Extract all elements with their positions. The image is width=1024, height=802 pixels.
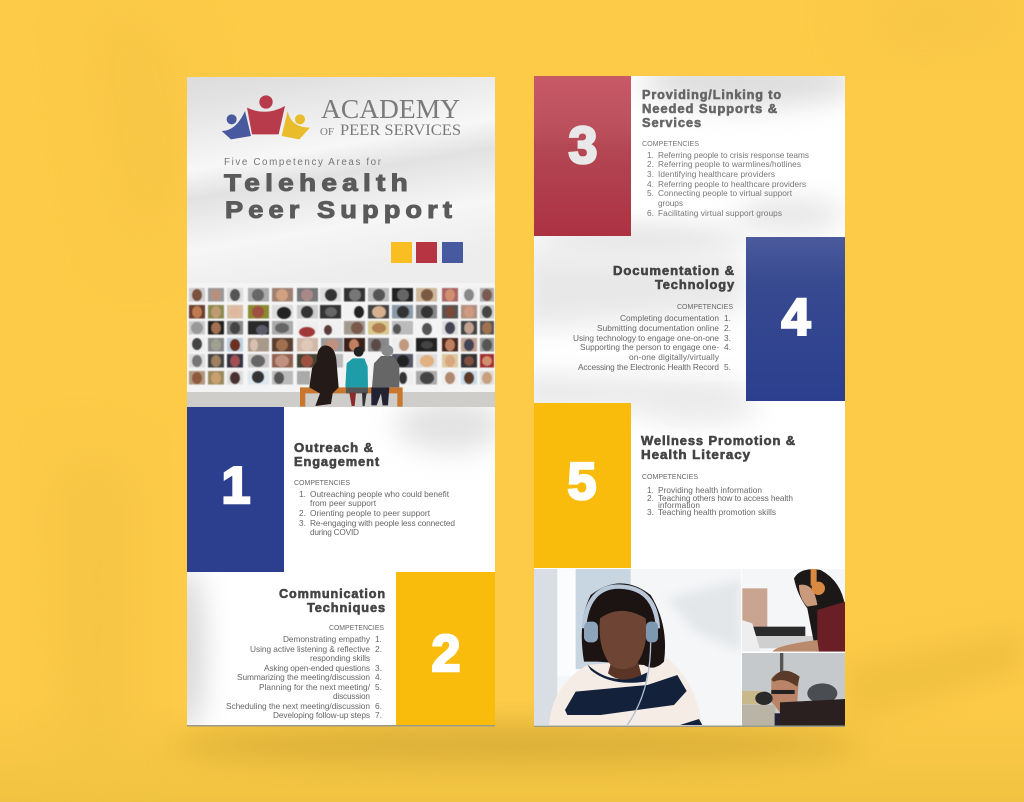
number block 4: 4 xyxy=(782,289,811,347)
panel bottom edges xyxy=(187,725,845,727)
photo: woman at laptop with orange headphones xyxy=(742,569,845,652)
number block 1 xyxy=(187,407,284,572)
competency list: Referring people to warmlines/hotlines xyxy=(658,159,801,169)
heading: Communication xyxy=(279,586,386,601)
heading xyxy=(642,89,781,128)
competency list: 2. xyxy=(299,508,306,518)
competency list: Outreaching people who could benefit xyxy=(310,489,450,499)
competency list: information xyxy=(658,500,700,510)
competency list: 5. xyxy=(375,682,382,692)
panel shading xyxy=(534,76,845,428)
competency list: Completing documentation xyxy=(620,313,719,323)
competency list: 4. xyxy=(647,179,654,189)
competency list: 6. xyxy=(375,701,382,711)
logo wordmark: OF xyxy=(320,127,334,138)
heading: Technology xyxy=(655,277,735,292)
competency list xyxy=(642,472,793,517)
competency list: Scheduling the next meeting/discussion xyxy=(226,701,370,711)
heading xyxy=(294,440,380,469)
heading xyxy=(613,263,735,292)
competency list xyxy=(642,139,809,218)
competency list: COMPETENCIES xyxy=(329,623,384,632)
number block 4 xyxy=(746,237,845,401)
subtitle: Five Competency Areas for xyxy=(224,157,382,168)
competency list: 1. xyxy=(724,313,731,323)
logo icon: three figures xyxy=(222,95,310,139)
competency list: Supporting the person to engage one- xyxy=(580,342,719,352)
competency list xyxy=(226,623,384,720)
number block 3 xyxy=(534,76,631,236)
competency list: 3. xyxy=(375,663,382,673)
competency list: Teaching health promotion skills xyxy=(658,507,776,517)
competency list: Asking open-ended questions xyxy=(264,663,370,673)
photo: man on the phone at a monitor xyxy=(742,653,845,726)
competency list: Facilitating virtual support groups xyxy=(658,208,782,218)
number block 5 xyxy=(534,403,631,568)
heading: Outreach & xyxy=(294,440,374,455)
logo: Academy of Peer Services xyxy=(222,94,461,139)
competency list: Planning for the next meeting/ xyxy=(259,682,371,692)
competency list: 3. xyxy=(647,169,654,179)
competency list: during COVID xyxy=(310,527,359,537)
competency list: 6. xyxy=(647,208,654,218)
number block 1: 1 xyxy=(222,457,250,515)
competency list: 1. xyxy=(647,150,654,160)
competency list: 1. xyxy=(647,485,654,495)
competency list: 4. xyxy=(724,342,731,352)
logo wordmark: ACADEMY xyxy=(321,94,460,124)
competency list: 3. xyxy=(647,507,654,517)
competency list: discussion xyxy=(333,691,370,701)
competency list: COMPETENCIES xyxy=(294,478,350,487)
photo collage xyxy=(534,569,845,726)
competency list: COMPETENCIES xyxy=(642,472,698,481)
title: Peer Support xyxy=(225,197,457,224)
number block 2: 2 xyxy=(432,625,460,683)
number block 5: 5 xyxy=(568,453,596,511)
heading: Providing/Linking to xyxy=(642,87,782,102)
left panel xyxy=(187,77,495,725)
logo wordmark xyxy=(320,100,460,135)
competency list: Submitting documentation online xyxy=(597,323,719,333)
panel: 4 Documentation & Technology xyxy=(573,237,845,401)
competency list: Re-engaging with people less connected xyxy=(310,518,455,528)
competency list: Summarizing the meeting/discussion xyxy=(237,672,370,682)
panel: 1 Outreach & Engagement xyxy=(187,407,455,572)
heading xyxy=(641,433,796,462)
competency list: groups xyxy=(658,198,683,208)
panel: 5 Wellness Promotion & Health Literacy xyxy=(534,403,796,568)
heading: Engagement xyxy=(294,454,380,469)
competency list: Referring people to healthcare providers xyxy=(658,179,806,189)
right panel xyxy=(534,76,845,726)
competency list: Identifying healthcare providers xyxy=(658,169,775,179)
heading: Documentation & xyxy=(613,263,735,278)
competency list: 2. xyxy=(724,323,731,333)
competency list: 2. xyxy=(375,644,382,654)
heading: Wellness Promotion & xyxy=(641,433,796,448)
competency list: Connecting people to virtual support xyxy=(658,188,793,198)
competency list: Demonstrating empathy xyxy=(283,634,371,644)
heading: Techniques xyxy=(307,600,386,615)
competency list: 2. xyxy=(647,159,654,169)
heading: Needed Supports & xyxy=(642,101,778,116)
competency list: 5. xyxy=(647,188,654,198)
competency list: 3. xyxy=(724,333,731,343)
competency list: from peer support xyxy=(310,498,377,508)
competency list: 5. xyxy=(724,362,731,372)
competency list: Referring people to crisis response teams xyxy=(658,150,809,160)
heading xyxy=(279,586,386,615)
competency list xyxy=(573,302,733,372)
background: yellow surface with soft shadows xyxy=(0,639,1024,802)
competency list: Teaching others how to access health xyxy=(658,493,793,503)
portrait wall xyxy=(189,288,494,384)
competency list: Providing health information xyxy=(658,485,762,495)
colour swatches xyxy=(391,242,463,263)
competency list: Using active listening & reflective xyxy=(250,644,370,654)
competency list: Accessing the Electronic Health Record xyxy=(578,362,719,372)
competency list: 1. xyxy=(375,634,382,644)
number block 3: 3 xyxy=(569,117,597,175)
panel: 3 Providing/Linking to Needed Supports & Services xyxy=(534,76,809,236)
photo: people viewing a wall of portraits xyxy=(187,283,495,407)
number block 2 xyxy=(396,572,495,725)
competency list: 7. xyxy=(375,710,382,720)
competency list: COMPETENCIES xyxy=(642,139,699,148)
competency list: Using technology to engage one-on-one xyxy=(573,333,719,343)
competency list xyxy=(294,478,455,537)
competency list: on-one digitally/virtually xyxy=(629,352,720,362)
competency list: responding skills xyxy=(310,653,370,663)
heading: Health Literacy xyxy=(641,447,751,462)
panel top header shading xyxy=(187,77,495,288)
competency list: Orienting people to peer support xyxy=(310,508,431,518)
competency list: 4. xyxy=(375,672,382,682)
competency list: 1. xyxy=(299,489,306,499)
logo wordmark: PEER SERVICES xyxy=(340,122,461,139)
competency list: COMPETENCIES xyxy=(677,302,733,311)
competency list: 3. xyxy=(299,518,306,528)
heading: Services xyxy=(642,115,702,130)
three seated viewers on a bench xyxy=(300,345,403,407)
title: Telehealth xyxy=(224,170,413,197)
panel: 2 Communication Techniques xyxy=(226,572,495,725)
competency list: 2. xyxy=(647,493,654,503)
title xyxy=(224,170,457,224)
photo: woman with headphones xyxy=(534,569,741,725)
competency list: Developing follow-up steps xyxy=(273,710,370,720)
